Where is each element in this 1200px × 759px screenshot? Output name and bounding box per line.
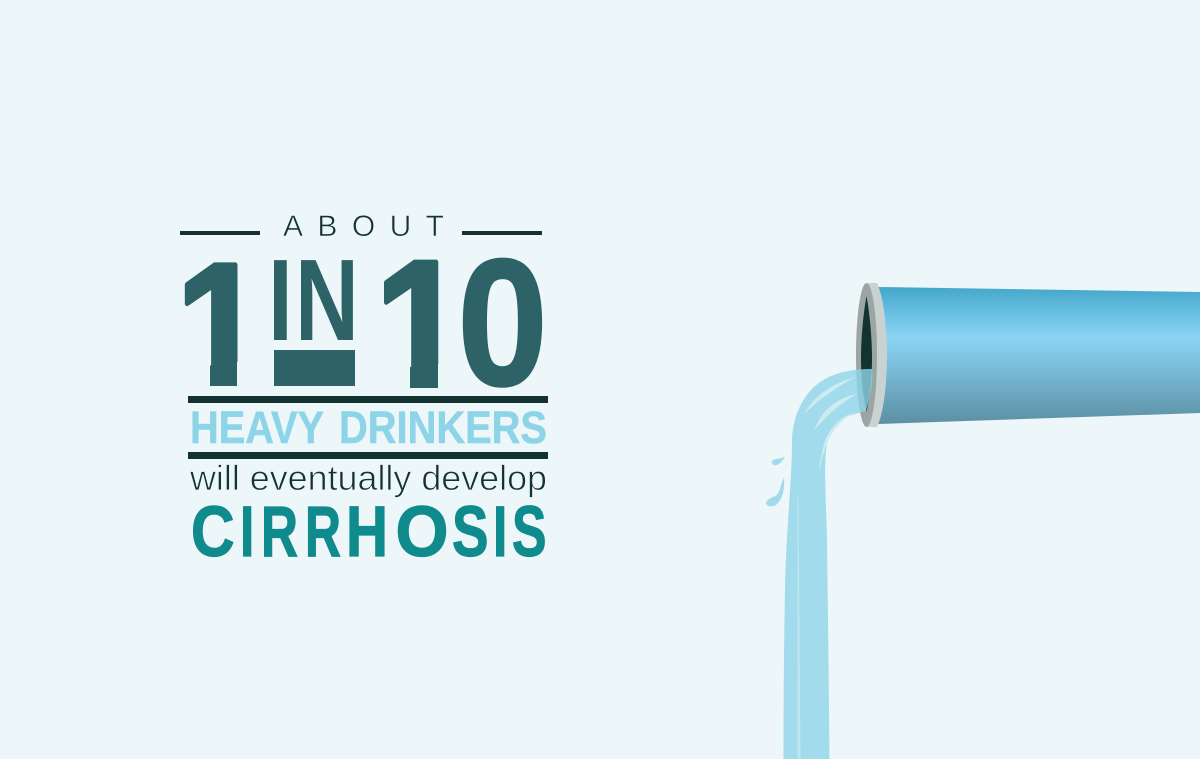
rule: below heavy drinkers [188,452,548,459]
text: cirrhosis: S [452,493,488,572]
text: cirrhosis: S [512,493,546,572]
text: cirrhosis: R [261,493,298,572]
text: heavy drinkers: HEAVY [190,402,324,453]
text: will eventually develop: will eventually develop [189,459,547,498]
pipe body [878,287,1200,424]
droplet: large [766,478,784,506]
number: first 1: 1 [176,227,265,424]
text: heavy drinkers: DRINKERS [339,402,547,453]
water stream [784,369,872,759]
highlight: middle [814,394,857,431]
text: cirrhosis: O [396,493,448,572]
number: second 1: 1 [375,222,467,427]
rule: right of about [462,231,542,235]
pipe rim [856,283,887,427]
word: in: IN [268,235,359,365]
text: cirrhosis: I [240,493,254,572]
illustration: pipe pouring water [766,283,1200,759]
text: about: ABOUT [283,210,444,243]
rule: left of about [180,231,260,235]
highlight: lower [819,412,855,471]
text: cirrhosis: I [493,493,507,572]
text: cirrhosis: C [191,493,235,572]
water droplets [766,456,785,506]
bar under in [274,350,355,386]
pipe opening [861,296,872,412]
droplet: small [772,456,785,465]
highlight: stream line [798,497,800,759]
rim inner edge [856,283,877,427]
rim front collar [866,283,887,427]
headline lockup [176,210,548,572]
text: cirrhosis: H [346,493,388,572]
rule: above heavy drinkers [188,396,548,403]
highlight: upper [804,377,855,414]
text: cirrhosis: R [305,493,341,572]
water highlights [798,377,857,759]
number: 0: 0 [457,222,548,424]
